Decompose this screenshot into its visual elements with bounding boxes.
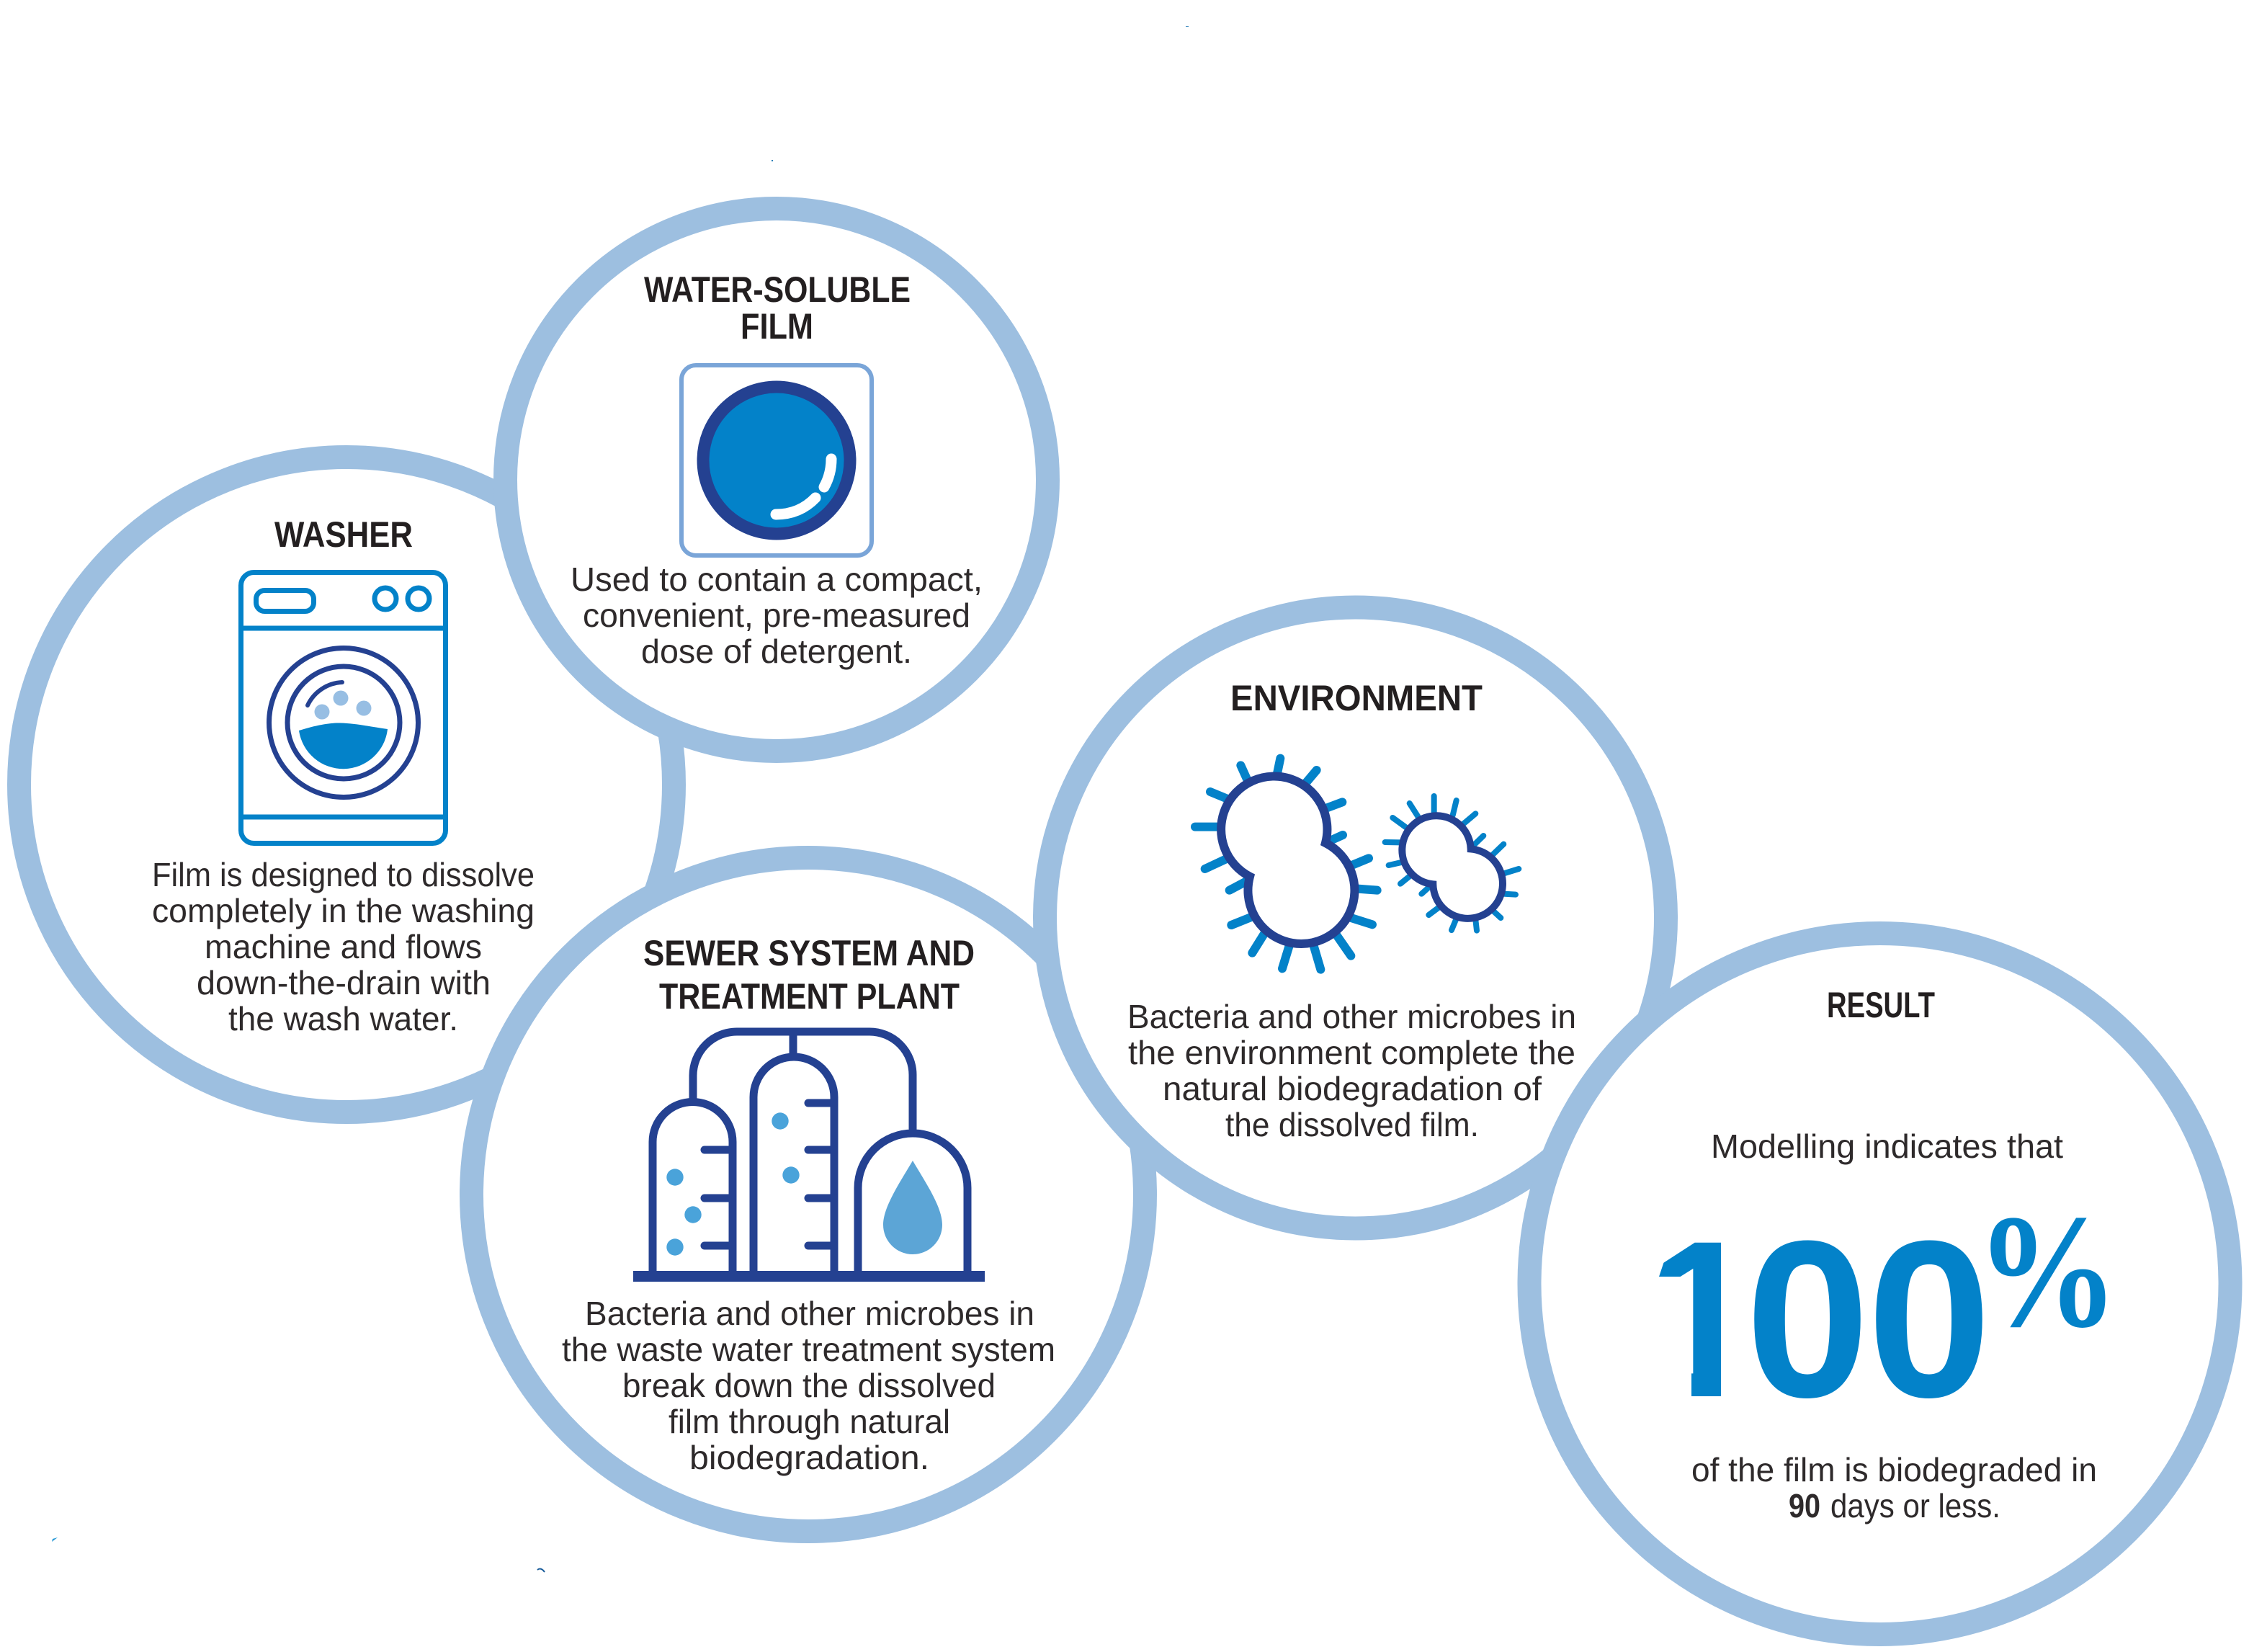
- ring: sewer: [471, 857, 1145, 1532]
- big number: 100%: 1: [1641, 1194, 1765, 1444]
- big number: 100%: 00: [1745, 1194, 1991, 1444]
- text: sewer description: biodegradation.: [689, 1439, 929, 1476]
- text: washer description: down-the-drain with: [197, 964, 491, 1001]
- text: washer description: machine and flows: [205, 928, 482, 965]
- panel: result: [1529, 934, 2230, 1634]
- big number: 100%: %: [1976, 1181, 2119, 1361]
- text: sewer description: [562, 1295, 1055, 1476]
- icon: washing machine: [241, 572, 445, 843]
- text: result description: [1691, 1451, 2097, 1524]
- text: film description: [571, 561, 983, 670]
- text: result description: days or less.: [1830, 1487, 2000, 1524]
- ring: result: [1529, 934, 2230, 1634]
- heading: water-soluble film: [644, 269, 911, 347]
- text: sewer description: Bacteria and other microbes in: [585, 1295, 1034, 1332]
- text: environment description: the dissolved film.: [1225, 1106, 1479, 1143]
- panel: water-soluble film: [506, 209, 1047, 751]
- text: sewer description: the waste water treatment system: [562, 1331, 1055, 1368]
- text: sewer description: break down the dissolved: [622, 1367, 996, 1404]
- panel: washer: [19, 457, 674, 1112]
- text: environment description: natural biodegradation of: [1163, 1070, 1542, 1107]
- text: film description: Used to contain a compact,: [571, 561, 983, 598]
- heading: washer: WASHER: [274, 514, 413, 555]
- heading: water-soluble film: FILM: [741, 306, 813, 347]
- text: film description: convenient, pre-measured: [583, 597, 970, 634]
- text: modelling intro: Modelling indicates that: [1711, 1128, 2063, 1165]
- ring: environment: [1045, 607, 1665, 1228]
- heading: sewer system and treatment plant: TREATMENT PLANT: [659, 976, 960, 1017]
- ring: washer: [19, 457, 674, 1112]
- text: result description: 90: [1789, 1487, 1820, 1524]
- icon: bacteria: [1195, 759, 1519, 970]
- text: washer description: the wash water.: [228, 1000, 458, 1037]
- text: washer description: Film is designed to dissolve: [152, 856, 535, 893]
- text: sewer description: film through natural: [669, 1403, 950, 1440]
- icon: film pod: [681, 365, 872, 555]
- panel: sewer system and treatment plant: [471, 857, 1145, 1532]
- text: environment description: the environment complete the: [1128, 1034, 1575, 1071]
- heading: sewer system and treatment plant: [643, 933, 975, 1017]
- heading: environment: ENVIRONMENT: [1230, 678, 1483, 718]
- text: washer description: [152, 856, 535, 1037]
- text: environment description: [1127, 998, 1576, 1143]
- heading: water-soluble film: WATER-SOLUBLE: [644, 269, 911, 310]
- icon: treatment plant: [633, 1032, 985, 1282]
- ring: film: [506, 209, 1047, 751]
- panel: environment: [1045, 607, 1665, 1228]
- heading: result: RESULT: [1827, 985, 1935, 1025]
- heading: sewer system and treatment plant: SEWER SYSTEM AND: [643, 933, 975, 973]
- text: washer description: completely in the washing: [152, 892, 535, 929]
- text: result description: of the film is biodegraded in: [1691, 1451, 2097, 1488]
- big number: 100%: [1659, 1218, 2105, 1398]
- text: film description: dose of detergent.: [641, 633, 912, 670]
- text: environment description: Bacteria and other microbes in: [1127, 998, 1576, 1035]
